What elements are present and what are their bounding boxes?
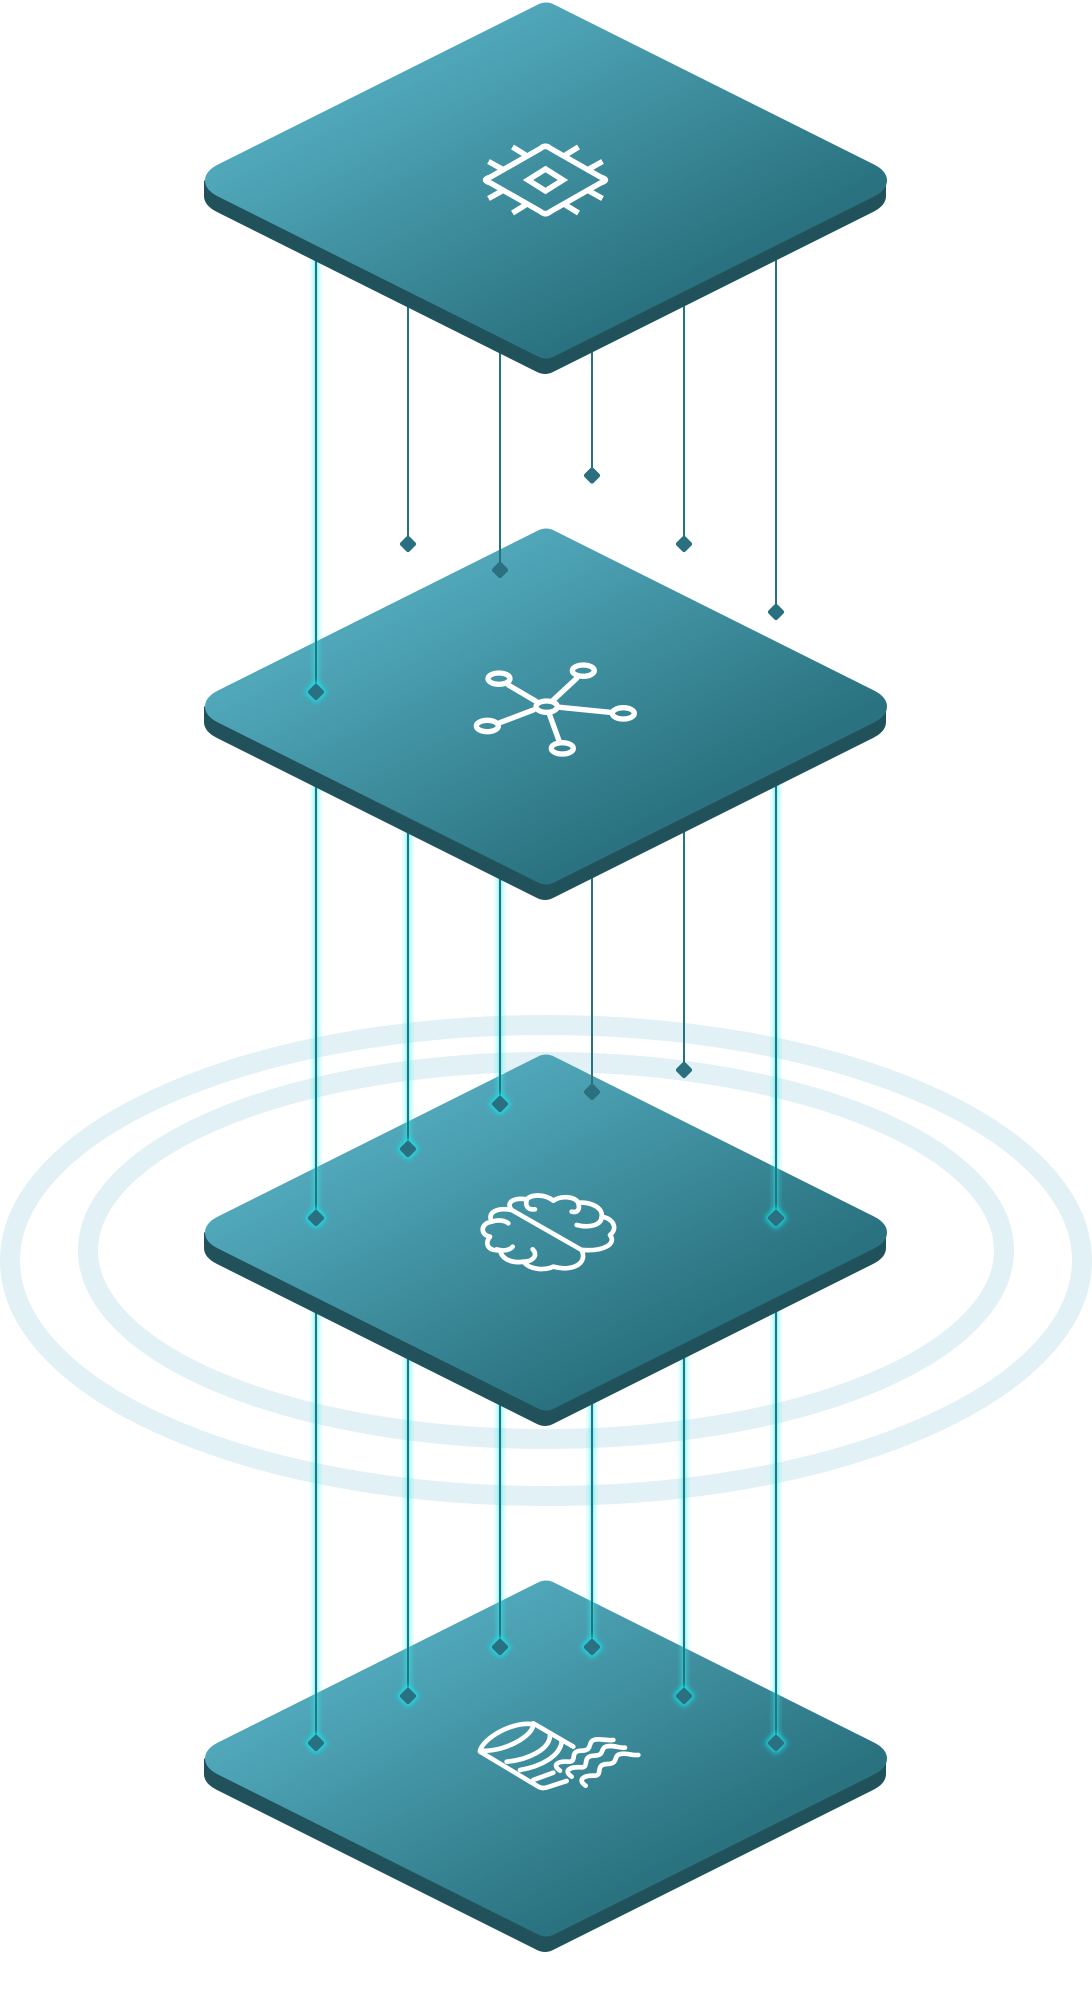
inner ring [88, 1062, 1004, 1439]
plate 1: top layer [204, 2, 887, 374]
plate 3: brain layer [204, 1054, 887, 1426]
icon: network nodes [476, 665, 634, 754]
icon: database with waves [480, 1723, 638, 1788]
outer ring [10, 1025, 1082, 1496]
icon: processor chip [486, 146, 606, 214]
connector lines: layer 2 to layer 3 [305, 714, 787, 1229]
connector lines: layer 3 to layer 4 [305, 1240, 787, 1754]
plate 2: network layer [204, 528, 887, 900]
connector lines: layer 1 to layer 2 [305, 188, 784, 703]
plate 4: bottom layer [204, 1580, 887, 1952]
icon: brain [483, 1195, 614, 1269]
